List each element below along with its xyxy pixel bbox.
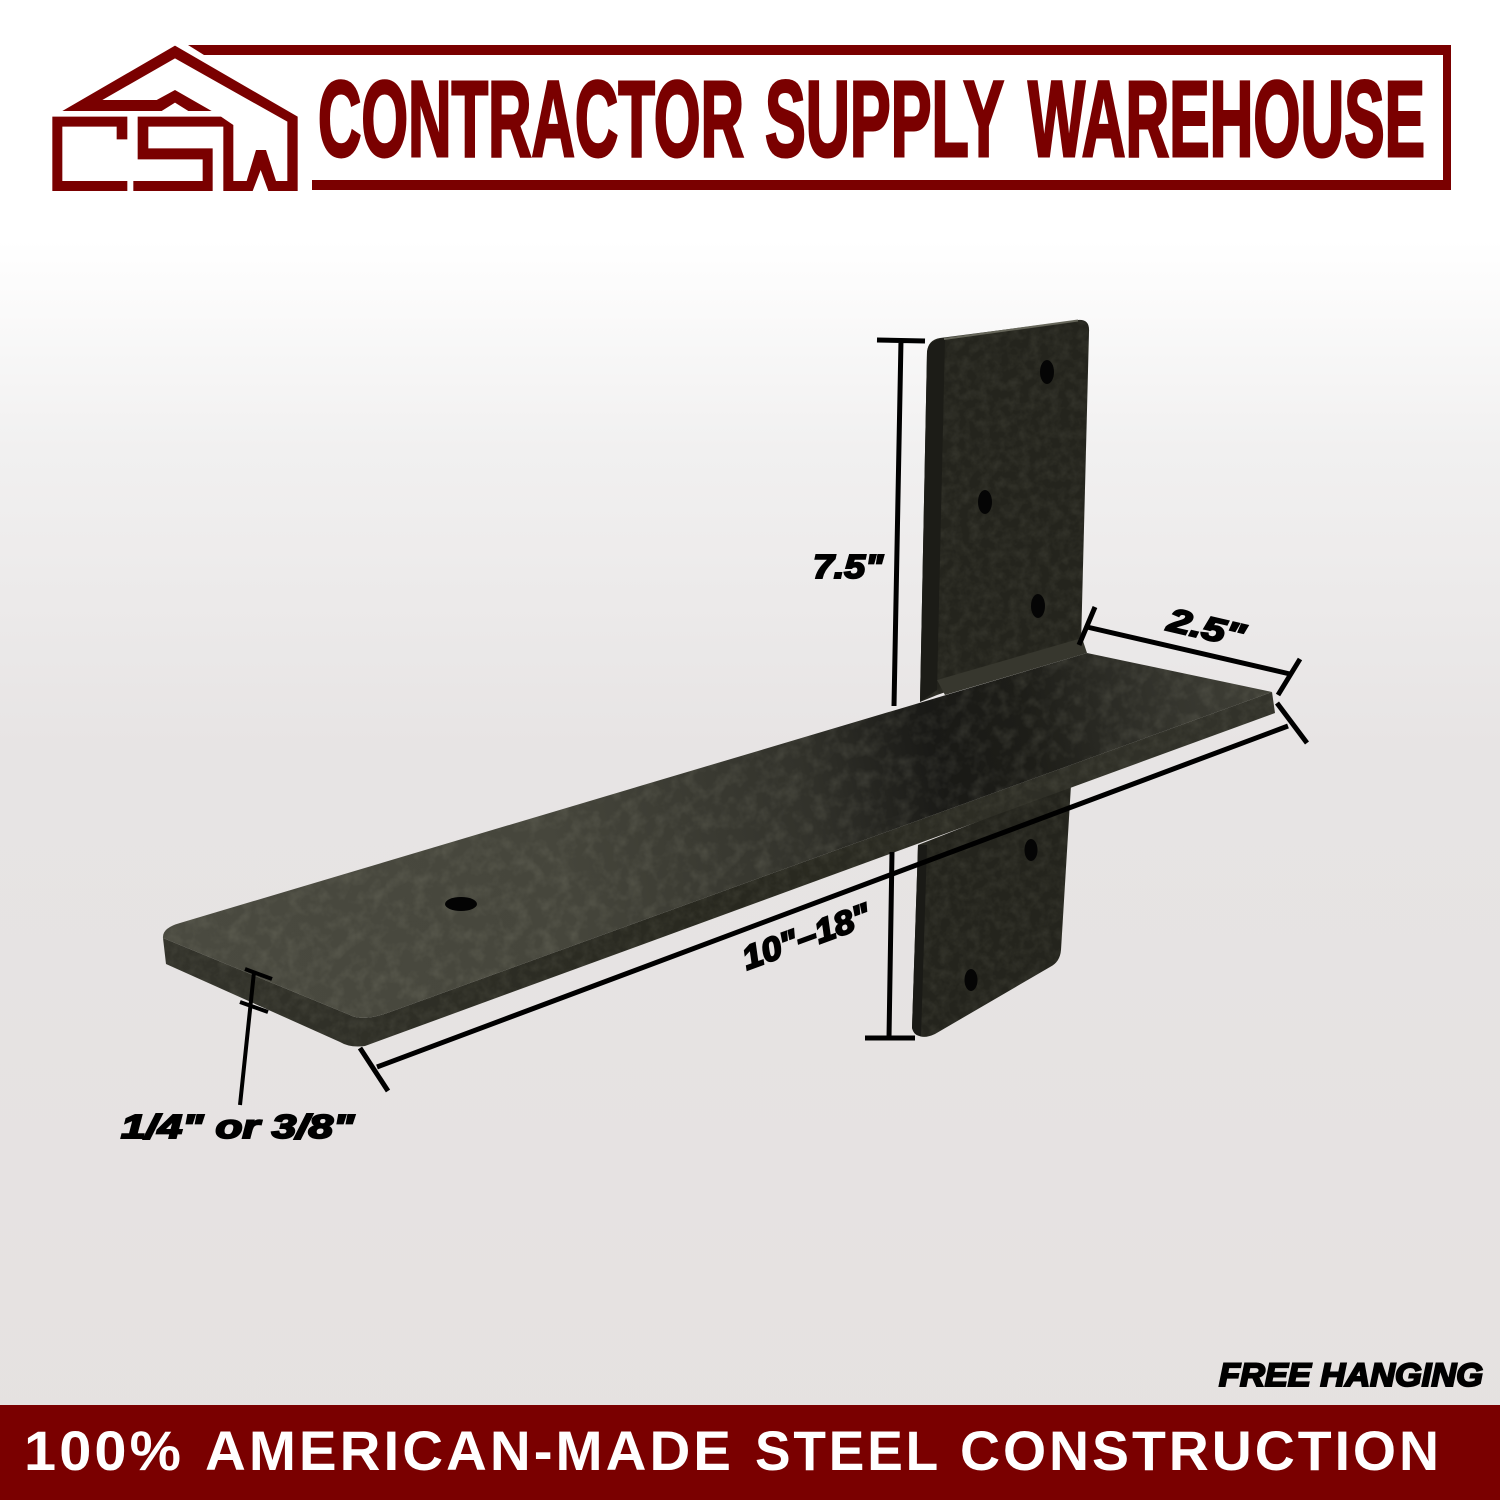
banner text: AMERICAN-MADE	[205, 1419, 734, 1482]
label: free hanging: FREE HANGING	[1219, 1357, 1483, 1393]
weld seam	[937, 638, 1087, 695]
hole	[445, 897, 477, 911]
dimension: width 2.5 inches	[1079, 600, 1300, 695]
hole	[978, 490, 992, 514]
banner text: CONSTRUCTION	[960, 1419, 1442, 1482]
company name: CONTRACTOR	[318, 58, 744, 179]
dimension: thickness	[121, 969, 354, 1145]
dimension: height 7.5 inches	[813, 340, 925, 1038]
label: 2.5: 2.5"	[1163, 600, 1249, 654]
dimension: length 10-18 inches	[360, 703, 1307, 1091]
hole	[1024, 839, 1038, 861]
banner text	[24, 1419, 1442, 1482]
upper vertical plate	[920, 320, 1089, 702]
banner text: 100%	[24, 1419, 184, 1482]
product: steel bracket	[163, 320, 1275, 1046]
label: 7.5: 7.5"	[813, 548, 883, 585]
label: thickness: 1/4" or 3/8"	[121, 1108, 354, 1145]
header frame	[188, 45, 1451, 190]
hole	[964, 969, 978, 991]
hole	[1040, 360, 1054, 384]
logo: CSW house	[52, 46, 298, 191]
horizontal plate	[163, 653, 1275, 1046]
label: 10-18: 10"–18"	[737, 896, 876, 977]
lower vertical plate	[912, 785, 1071, 1037]
bottom banner	[0, 1405, 1500, 1500]
hole	[1031, 594, 1045, 618]
company name: SUPPLY	[765, 58, 1004, 179]
header: company logo and name	[52, 45, 1451, 191]
banner text: STEEL	[755, 1419, 941, 1482]
company name	[318, 58, 1425, 179]
